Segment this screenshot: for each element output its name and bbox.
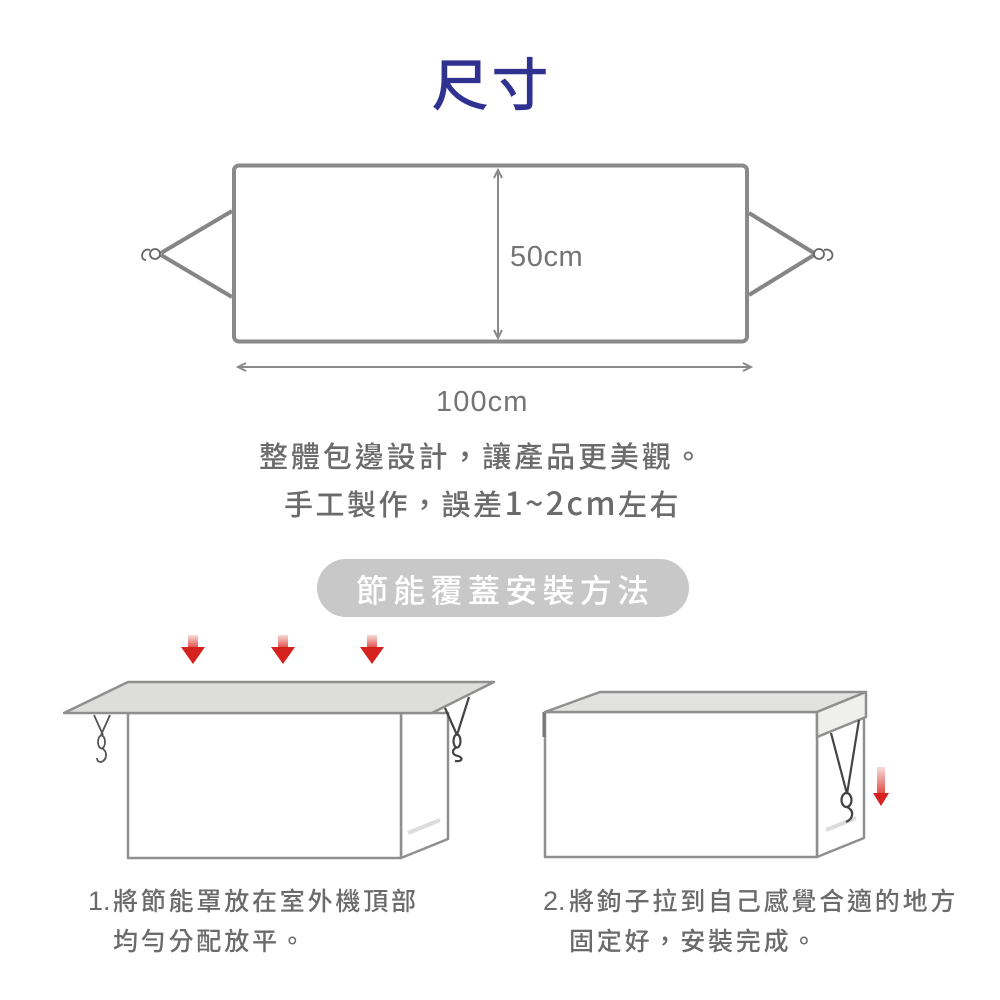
right straps and hook — [749, 213, 832, 295]
left straps and hook — [142, 211, 232, 297]
height arrow — [494, 170, 502, 338]
title: 尺寸 — [432, 41, 552, 122]
step 2 caption: 2. — [543, 886, 566, 916]
step 1 caption — [88, 882, 419, 958]
step 1 left hook — [94, 715, 110, 762]
step 2 hook — [831, 720, 859, 822]
step 2 caption — [543, 882, 958, 958]
step 1 right hook — [445, 697, 469, 761]
step 1 box — [128, 713, 448, 858]
width arrow — [238, 363, 751, 371]
step 1 caption: 均勻分配放平。 — [113, 922, 308, 958]
step 2 box — [544, 712, 864, 857]
step 2 caption: 固定好，安裝完成。 — [569, 922, 819, 958]
section pill heading — [317, 559, 689, 617]
height label: 50cm — [510, 241, 583, 273]
step 1 red arrows — [181, 635, 384, 664]
step 1 caption: 1. — [88, 886, 111, 916]
step 1 cover — [64, 682, 494, 713]
step 2 red arrow — [873, 767, 889, 806]
cover outline — [234, 166, 747, 342]
step 2 caption: 將鉤子拉到自己感覺合適的地方 — [569, 882, 958, 918]
step 2 cover — [545, 692, 866, 737]
step 1 caption: 將節能罩放在室外機頂部 — [113, 882, 419, 918]
width label: 100cm — [436, 386, 529, 418]
section pill heading: 節能覆蓋安裝方法 — [356, 566, 654, 612]
description line 2: 手工製作，誤差1~2cm左右 — [284, 479, 681, 525]
diagram: dimensions — [141, 164, 834, 372]
description line 1: 整體包邊設計，讓產品更美觀。 — [259, 434, 706, 476]
